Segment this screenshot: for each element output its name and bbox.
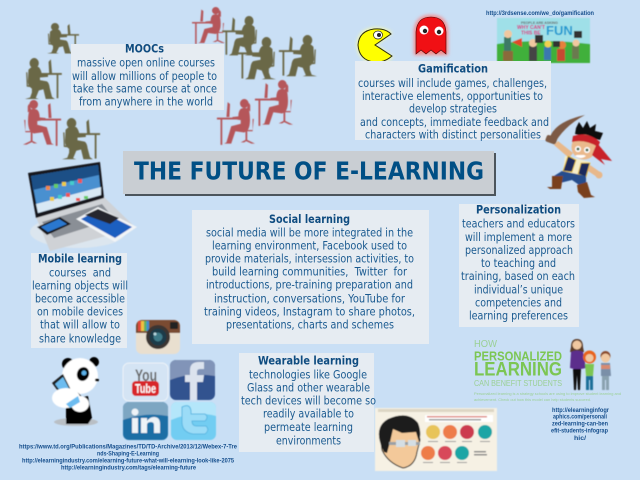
people silhouettes — [23, 7, 317, 159]
text: Social learning description: provide materials, intersession activities, to — [205, 252, 414, 266]
text: Gamification description: courses will include games, challenges, — [358, 76, 547, 90]
text: Mobile learning description: become accessible — [35, 292, 125, 306]
source link: gamification: http://3rdsense.com/we_do/gamification — [486, 10, 594, 17]
text: Personalization description — [461, 217, 575, 323]
text: Wearable learning description: Glass and other wearable — [247, 381, 370, 395]
text: Social learning description: social media will be more integrated in the — [206, 226, 413, 240]
text: Mobile learning description: that will allow to — [40, 317, 120, 331]
icon: twitter — [171, 402, 216, 440]
text: Personalization description: learning preferences — [469, 309, 568, 323]
text: Social learning description: presentations, charts and schemes — [226, 318, 394, 332]
image: laptop, tablet and phones — [28, 162, 137, 251]
text: MOOCs description: massive open online courses — [77, 56, 215, 70]
image: why can't this be fun — [497, 18, 590, 63]
image: how personalized learning can benefit students: HOW — [474, 338, 497, 350]
illustration: teacher and two students — [570, 339, 611, 390]
title banner — [123, 151, 496, 196]
text: Personalization description: will implement a more — [465, 230, 572, 244]
text: Social learning description: introductions, pre-training preparation and — [206, 278, 413, 292]
icon: pacman — [357, 28, 393, 63]
text: Mobile learning description: courses and — [49, 266, 111, 280]
panel: Mobile learning — [31, 252, 128, 348]
sources list: http://elearningindustry.com/elearning-future-what-will-elearning-look-like-2075 — [22, 457, 234, 464]
text: Gamification description: interactive elements, opportunities to — [362, 89, 543, 103]
panel: Personalization — [459, 203, 579, 327]
text: Personalization description: personalized approach — [465, 243, 573, 257]
icon: youtube: You — [135, 366, 157, 385]
icon: linkedin — [123, 402, 168, 440]
text: Gamification description: develop strategies — [409, 102, 497, 116]
image: why can't this be fun: FUN — [546, 23, 573, 38]
text: Mobile learning description: on mobile devices — [37, 305, 123, 319]
text: Mobile learning description — [32, 266, 128, 346]
image: how personalized learning can benefit students: PERSONALIZED — [474, 350, 562, 364]
sources list: https://www.td.org/Publications/Magazines/TD/TD-Archive/2013/12/Webex-7-Tre — [19, 444, 237, 451]
panel: Wearable learning — [239, 353, 376, 452]
text: Wearable learning description: tech devices will become so — [241, 394, 376, 408]
text: Social learning description: learning environment, Facebook used to — [212, 239, 407, 253]
text: Personalization description: teachers and educators — [462, 217, 575, 231]
icon: facebook — [170, 360, 215, 400]
icon: red ghost — [414, 15, 448, 55]
source link: personalized learning infographic — [551, 407, 609, 442]
text: MOOCs description — [72, 56, 217, 109]
text: Gamification description: characters with distinct personalities — [365, 128, 541, 142]
text: MOOCs description: from anywhere in the world — [79, 95, 213, 109]
text: Social learning description: training videos, Instagram to share photos, — [204, 305, 415, 319]
heading: Social learning: Social learning — [269, 212, 350, 226]
heading: Gamification: Gamification — [418, 62, 488, 76]
image: how personalized learning can benefit students — [474, 338, 621, 402]
image: why can't this be fun: PEOPLE ARE ASKING — [521, 21, 558, 25]
sources list — [19, 444, 237, 471]
panel: MOOCs — [71, 42, 224, 110]
text: Personalization description: training, based on each — [461, 269, 575, 283]
text: Personalization description: to teaching and — [481, 256, 556, 270]
sources list: nds-Shaping-E-Learning — [97, 450, 159, 457]
source link: personalized learning infographic: aphics.com/personali — [553, 414, 607, 421]
image: how personalized learning can benefit students: achievement. Check out how this model can help students succeed. — [474, 398, 591, 402]
image: how personalized learning can benefit students: Personalized learning is a strategy schools are using to improve student learning and — [474, 392, 621, 396]
icon: panda with phone — [52, 357, 99, 426]
source link: personalized learning infographic: efit-students-infograp — [551, 427, 608, 434]
icon: youtube — [123, 363, 168, 401]
text: Mobile learning description: share knowledge — [39, 332, 121, 346]
icon: pirate boy — [545, 115, 612, 198]
text: Wearable learning description: technologies like Google — [249, 368, 367, 382]
text: Wearable learning description: environments — [276, 434, 341, 448]
text: MOOCs description: take the same course at once — [73, 82, 217, 96]
text: Mobile learning description: learning objects will — [32, 279, 128, 293]
text: Social learning description: build learning communities, Twitter for — [212, 265, 407, 279]
text: Wearable learning description: permeate learning — [264, 420, 353, 434]
text: Wearable learning description: readily available to — [263, 407, 354, 421]
source link: personalized learning infographic: zed-learning-can-ben — [552, 421, 608, 428]
heading: MOOCs: MOOCs — [125, 42, 164, 56]
image: why can't this be fun: WHY CAN'T — [517, 25, 545, 31]
panel: Gamification — [355, 61, 551, 142]
text: Personalization description: individual’s unique — [474, 283, 563, 297]
sources list: http://elearningindustry.com/tags/elearning-future — [61, 464, 196, 471]
text: Wearable learning description — [241, 368, 376, 448]
text: MOOCs description: will allow millions of people to — [72, 69, 217, 83]
image: how personalized learning can benefit students: LEARNING — [474, 360, 562, 381]
image: google glass infographic — [375, 408, 497, 471]
text: Social learning description — [204, 226, 415, 332]
source link: personalized learning infographic: http://elearninginfogr — [552, 407, 609, 414]
text: Personalization description: competencies and — [475, 296, 562, 310]
panel: Social learning — [192, 210, 429, 344]
text: Gamification description: and concepts, immediate feedback and — [360, 115, 549, 129]
heading: Personalization: Personalization — [476, 203, 561, 217]
heading: Wearable learning: Wearable learning — [258, 354, 359, 368]
heading: Mobile learning: Mobile learning — [38, 252, 122, 266]
text: Social learning description: instruction, conversations, YouTube for — [214, 291, 405, 305]
image: why can't this be fun: THIS BE — [521, 30, 541, 36]
icon: instagram — [136, 320, 180, 354]
text: Gamification description — [358, 76, 549, 142]
image: how personalized learning can benefit students: CAN BENEFIT STUDENTS — [474, 379, 562, 388]
source link: personalized learning infographic: hic/ — [574, 435, 586, 442]
title text: THE FUTURE OF E-LEARNING — [134, 156, 484, 186]
icon: youtube: Tube — [135, 382, 156, 396]
